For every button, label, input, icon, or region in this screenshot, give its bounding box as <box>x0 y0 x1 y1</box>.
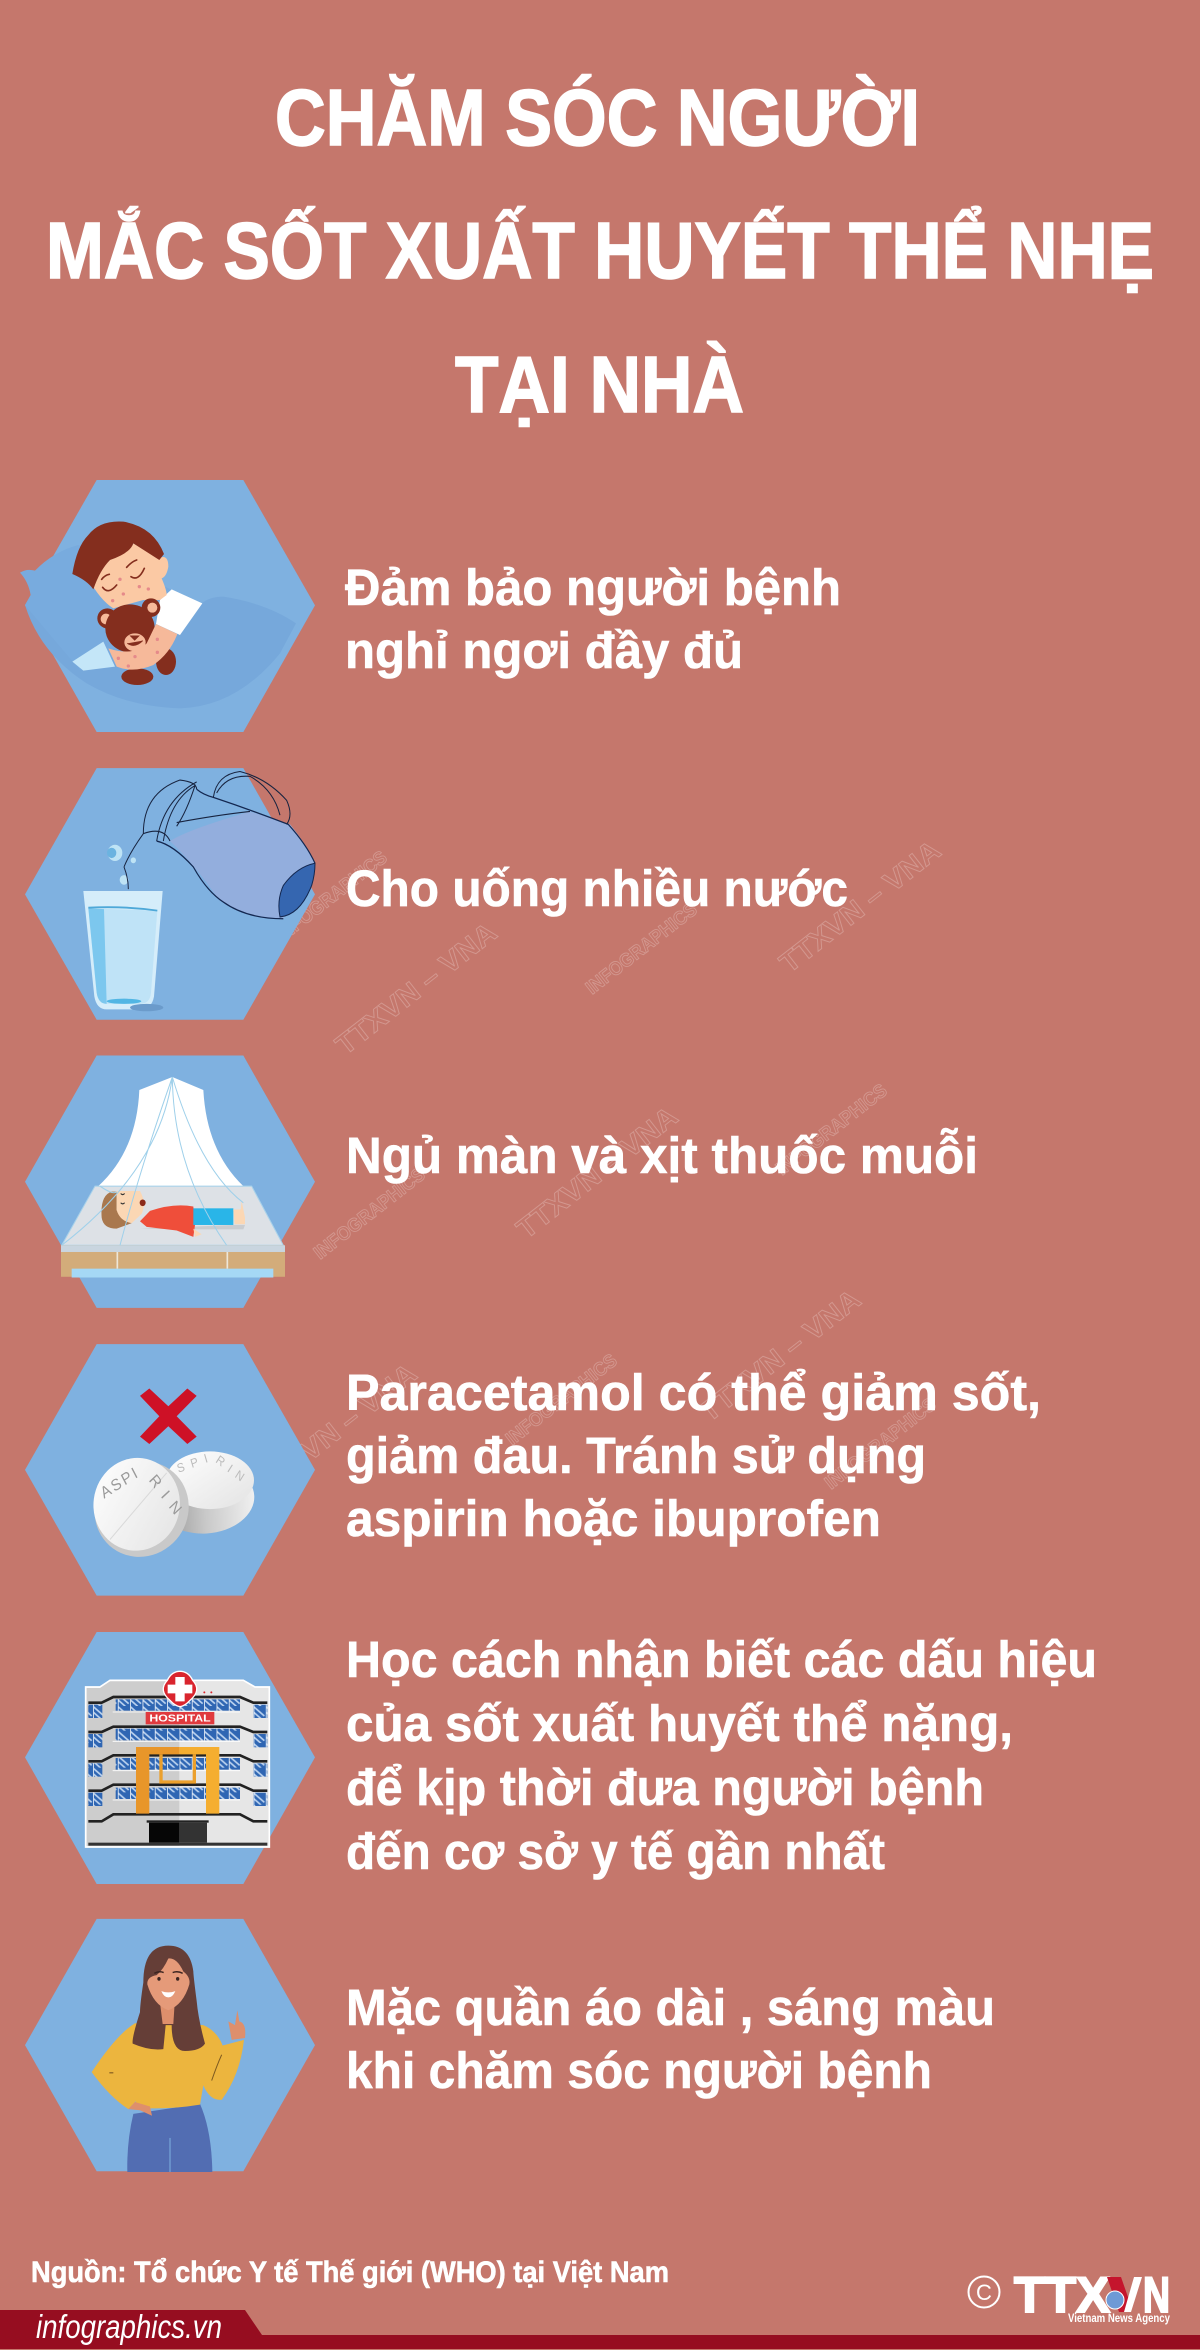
logo: TTXVN: C <box>976 2280 992 2305</box>
watermarks: TTXVN – VNA <box>250 1357 422 1502</box>
watermarks: INFOGRAPHICS <box>310 1164 429 1264</box>
watermarks: INFOGRAPHICS <box>772 1080 891 1180</box>
text: medicine <box>346 1364 1041 1547</box>
icon: crossed-out aspirin tablets <box>25 1344 315 1596</box>
icon: crossed-out aspirin tablets: SPI <box>175 1451 209 1476</box>
icon: crossed-out aspirin tablets: ASPI <box>98 1465 141 1502</box>
text: warning signs: đến cơ sở y tế gần nhất <box>346 1823 885 1880</box>
text: warning signs <box>346 1631 1097 1880</box>
text: rest <box>345 559 841 679</box>
text: rest: nghỉ ngơi đầy đủ <box>345 622 743 679</box>
icon: crossed-out aspirin tablets: RIN <box>213 1452 247 1484</box>
logo: TTXVN: Vietnam News Agency <box>1068 2311 1170 2325</box>
icon: hospital building <box>25 1632 315 1884</box>
text: clothing <box>346 1979 995 2099</box>
title <box>46 73 1154 429</box>
watermarks: INFOGRAPHICS <box>272 847 391 947</box>
title: TẠI NHÀ <box>455 340 744 429</box>
text: rest: Đảm bảo người bệnh <box>345 559 841 616</box>
title: CHĂM SÓC NGƯỜI <box>275 73 920 162</box>
text: medicine: Paracetamol có thể giảm sốt, <box>346 1364 1041 1421</box>
watermarks: TTXVN – VNA <box>511 1100 683 1245</box>
source: Nguồn: Tổ chức Y tế Thế giới (WHO) tại Việt Nam <box>31 2256 669 2289</box>
logo: TTXVN: N <box>1143 2267 1170 2323</box>
text: clothing: khi chăm sóc người bệnh <box>346 2042 932 2099</box>
icon: sleeping child with teddy bear <box>20 480 315 732</box>
watermarks: TTXVN – VNA <box>774 834 946 979</box>
logo: TTXVN: TTX <box>1014 2267 1110 2323</box>
logo: TTXVN <box>968 2267 1170 2325</box>
watermarks: TTXVN – VNA <box>330 916 502 1061</box>
watermarks: INFOGRAPHICS <box>582 899 701 999</box>
text: mosquito net: Ngủ màn và xịt thuốc muỗi <box>346 1127 978 1184</box>
watermarks <box>250 834 946 1502</box>
text: warning signs: của sốt xuất huyết thể nặng, <box>346 1695 1013 1752</box>
text: medicine: giảm đau. Tránh sử dụng <box>346 1427 926 1484</box>
text: warning signs: Học cách nhận biết các dấu hiệu <box>346 1631 1097 1688</box>
icon: hospital building: HOSPITAL <box>149 1714 211 1725</box>
panel: rest <box>20 480 315 2172</box>
icon: crossed-out aspirin tablets: RIN <box>145 1471 185 1518</box>
icon: person sleeping under a mosquito net <box>25 1056 315 1308</box>
text: medicine: aspirin hoặc ibuprofen <box>346 1490 881 1547</box>
icon: woman in long-sleeve clothes <box>25 1919 315 2172</box>
footer band: infographics.vn <box>36 2308 222 2345</box>
watermarks: INFOGRAPHICS <box>821 1394 940 1494</box>
watermarks: INFOGRAPHICS <box>502 1350 621 1450</box>
icon: jug pouring water into a glass <box>25 768 315 1020</box>
text: clothing: Mặc quần áo dài , sáng màu <box>346 1979 995 2036</box>
text: drink water: Cho uống nhiều nước <box>346 860 848 917</box>
watermarks: TTXVN – VNA <box>694 1283 866 1428</box>
footer band <box>0 2308 1200 2349</box>
text: warning signs: để kịp thời đưa người bệnh <box>346 1759 984 1816</box>
